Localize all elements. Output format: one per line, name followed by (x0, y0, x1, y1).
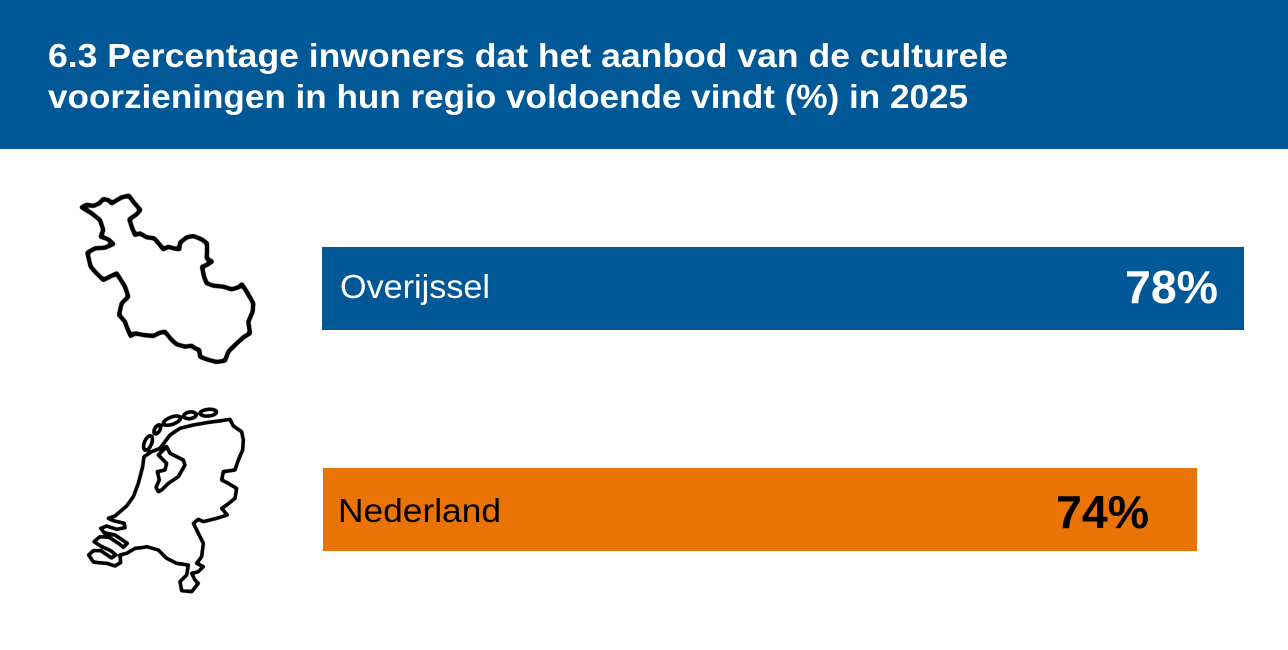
mainland outline (89, 419, 243, 592)
title: 6.3 Percentage inwoners dat het aanbod van de culturele (48, 37, 1008, 74)
header band (0, 0, 1288, 149)
icon: map of Overijssel (82, 196, 253, 362)
label: Overijssel: Overijssel (340, 268, 490, 305)
IJsselmeer (156, 447, 185, 492)
icon: map of Nederland (89, 409, 243, 592)
title: voorzieningen in hun regio voldoende vindt (%) in 2025 (48, 78, 968, 115)
value: 74%: 74% (1056, 486, 1149, 538)
label: Nederland: Nederland (338, 492, 501, 529)
value: 78%: 78% (1125, 261, 1218, 313)
Wadden islands (142, 435, 154, 451)
bar: Overijssel (322, 247, 1244, 330)
title (48, 37, 1008, 115)
bar: Nederland (323, 468, 1197, 551)
